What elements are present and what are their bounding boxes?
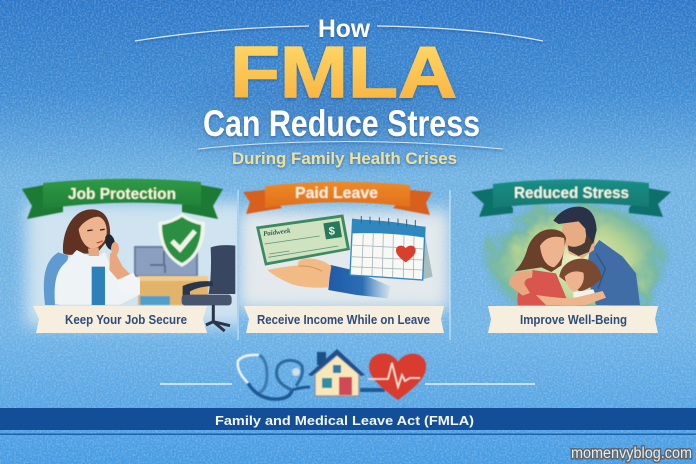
- icon: stethoscope: [238, 355, 310, 399]
- title: Can Reduce Stress: Can Reduce Stress: [203, 103, 480, 144]
- caption text: Keep Your Job Secure: [65, 312, 187, 327]
- ribbon banner: job protection: [22, 179, 223, 219]
- caption ribbon: receive income while on leave: [244, 306, 444, 333]
- banner label: Paid Leave: [295, 185, 378, 202]
- caption ribbon: improve well-being: [488, 306, 658, 333]
- footer text: Family and Medical Leave Act (FMLA): [215, 413, 474, 428]
- illustration: paycheck: $: [329, 226, 336, 238]
- title block: [135, 15, 543, 168]
- icon group: health and home: [238, 349, 426, 400]
- title: FMLA: FMLA: [230, 33, 457, 113]
- icon: office chair: [182, 245, 235, 331]
- caption ribbon: keep your job secure: [33, 306, 207, 333]
- illustration: paycheck: Paidweek: [263, 227, 291, 238]
- icon: heart with pulse: [368, 353, 426, 400]
- panel divider lines: [238, 190, 450, 340]
- ribbon banner: paid leave: [243, 182, 432, 215]
- panel: job protection: [22, 179, 251, 333]
- banner label: Job Protection: [68, 186, 176, 203]
- panel backdrop: [479, 196, 675, 328]
- ribbon banner: reduced stress: [471, 179, 671, 217]
- banner label: Reduced Stress: [514, 185, 629, 202]
- caption text: Receive Income While on Leave: [257, 312, 430, 327]
- icon: shield with check: [158, 213, 205, 267]
- illustration: open hand and sleeve: [267, 259, 391, 298]
- bottom divider lines: [160, 383, 535, 385]
- illustration: woman on the phone: [44, 209, 140, 305]
- panel backdrop: [26, 202, 251, 326]
- illustration: office desk and monitor: [135, 247, 208, 305]
- illustration: paycheck: [256, 214, 350, 266]
- title: How: How: [318, 15, 371, 43]
- footer band: [0, 408, 696, 435]
- icon: house: [308, 349, 365, 396]
- panel: paid leave: [238, 182, 450, 333]
- panel backdrop: [238, 210, 450, 310]
- caption text: Improve Well-Being: [520, 312, 627, 327]
- panel: reduced stress: [471, 179, 675, 333]
- subtitle: During Family Health Crises: [232, 149, 457, 168]
- icon: calendar with heart: [350, 216, 433, 280]
- illustration: embracing family: [509, 207, 640, 305]
